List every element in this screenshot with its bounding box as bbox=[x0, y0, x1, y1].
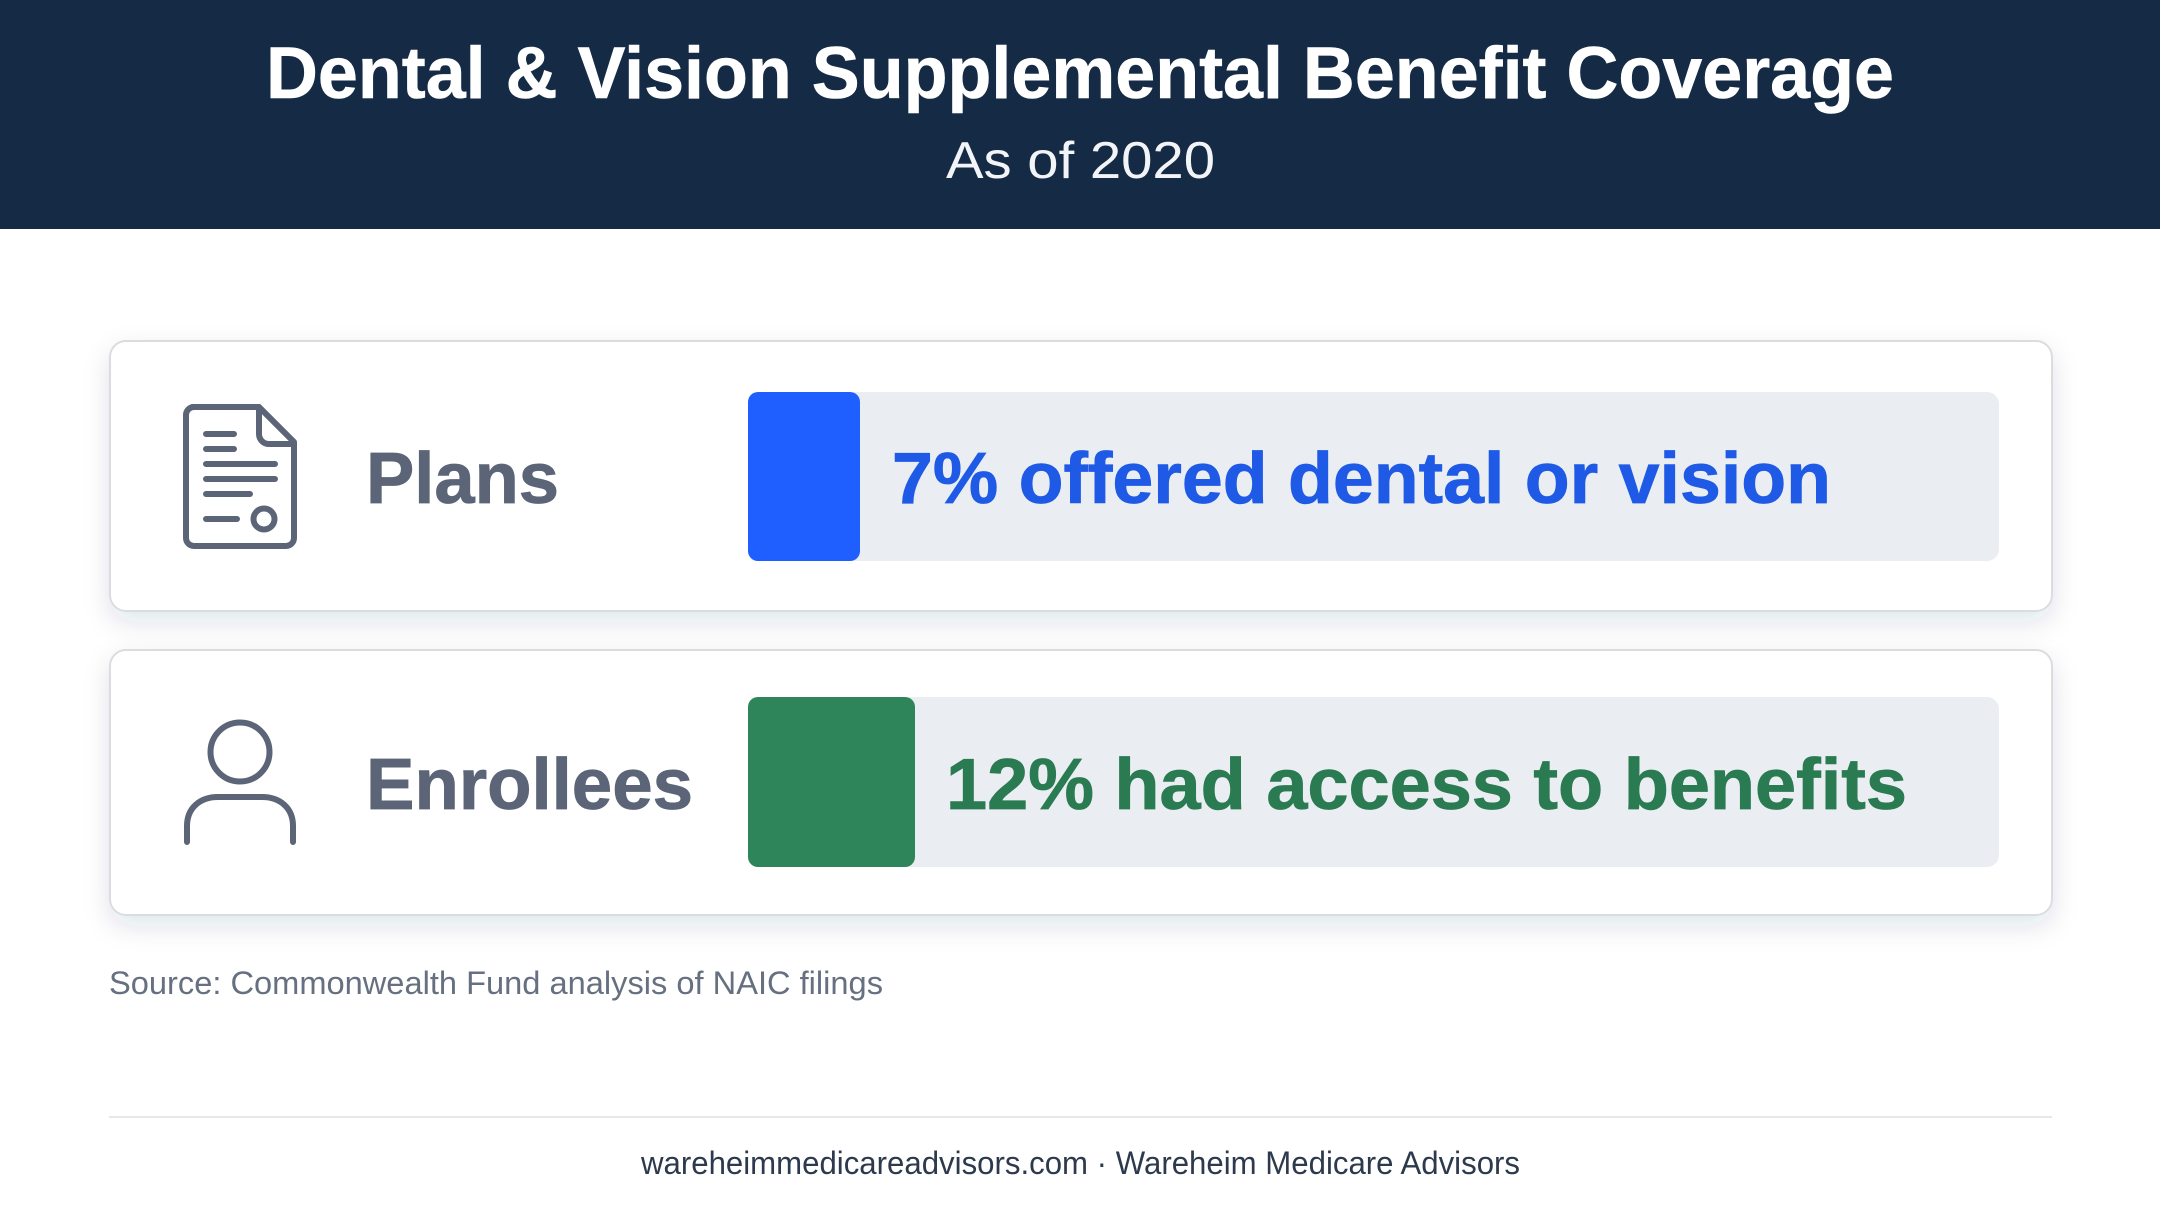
label: enrollees: Enrollees bbox=[366, 745, 693, 825]
bar fill: 7% bbox=[748, 392, 860, 561]
source note: Source: Commonwealth Fund analysis of NAIC filings bbox=[109, 965, 883, 1001]
bar fill: 12% bbox=[748, 697, 915, 867]
icon: person bbox=[187, 722, 293, 842]
footer: wareheimmedicareadvisors.com · Wareheim Medicare Advisors bbox=[640, 1145, 1520, 1181]
header band bbox=[0, 0, 2160, 229]
panel: enrollees bbox=[110, 650, 2052, 915]
bar track: plans bbox=[748, 392, 1999, 561]
title: Dental & Vision Supplemental Benefit Coverage bbox=[266, 33, 1894, 114]
value: 7% offered dental or vision: 7% offered dental or vision bbox=[892, 439, 1831, 519]
icon: document bbox=[186, 407, 294, 546]
value: 12% had access to benefits: 12% had access to benefits bbox=[946, 745, 1907, 825]
panel: plans bbox=[110, 341, 2052, 611]
subtitle: As of 2020 bbox=[946, 132, 1215, 190]
label: plans: Plans bbox=[366, 439, 559, 519]
bar track: enrollees bbox=[748, 697, 1999, 867]
